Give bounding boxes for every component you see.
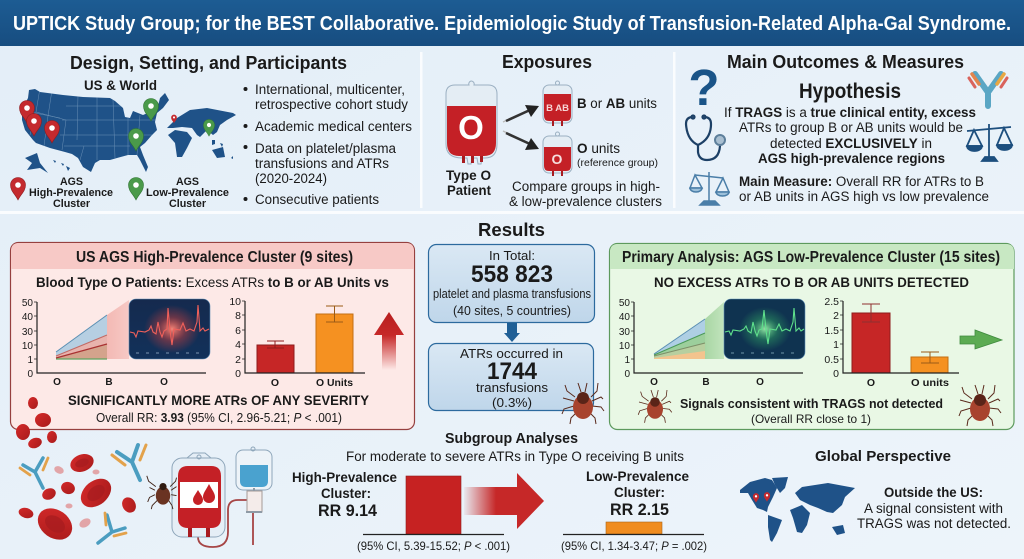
- area chart: low prevalence: 30: [619, 327, 630, 338]
- text: overall RR close to 1: (Overall RR close to 1): [751, 412, 871, 426]
- area chart: low prevalence: O: [756, 377, 764, 388]
- tube: [198, 500, 247, 547]
- axis line and CI: low prevalence: (95% CI, 1.34-3.47; P = .002): [561, 539, 707, 553]
- icon: stethoscope: [686, 116, 725, 160]
- arrow: flat right: [960, 330, 1002, 349]
- bar chart: low prevalence: O: [867, 377, 875, 389]
- legend: high prevalence: AGS: [60, 176, 83, 188]
- red blood cells: [16, 397, 139, 546]
- area chart: high prevalence: 10: [22, 341, 33, 352]
- icon: balance scale right: [967, 124, 1012, 161]
- area chart: low prevalence: [619, 298, 803, 388]
- arrow: totals to ATRs: [504, 323, 520, 342]
- bar chart: low prevalence: 0.5: [824, 354, 839, 366]
- image: red ECG monitor: [129, 299, 210, 359]
- label: low prevalence RR: Low-Prevalence: [586, 469, 689, 484]
- text: compare groups: & low-prevalence clusters: [509, 194, 662, 209]
- legend: low prevalence: Cluster: [169, 198, 207, 210]
- antibody left: [20, 458, 48, 488]
- panel: ATRs occurred: [428, 344, 594, 410]
- label: O units reference group: O units: [577, 141, 620, 156]
- map: US and world: [20, 88, 236, 173]
- text: outside the US: A signal consistent with: [864, 501, 1003, 516]
- area chart: high prevalence: 30: [22, 327, 33, 338]
- pin: low prevalence 1: [144, 98, 158, 121]
- bullet list: study design: transfusions and ATRs: [255, 156, 389, 171]
- panel: primary analysis low-prevalence cluster: [610, 244, 1014, 430]
- antibody upper right: [112, 445, 146, 480]
- bar chart: high prevalence: [229, 296, 365, 389]
- bar chart: low prevalence: O units: [911, 377, 949, 389]
- icon: tick right: [959, 385, 1001, 426]
- panel header: high prevalence: US AGS High-Prevalence Cluster (9 sites): [76, 249, 353, 266]
- icon: question mark: ?: [688, 59, 720, 116]
- text: transfusions detail: (40 sites, 5 countries): [453, 303, 571, 318]
- text: main measure: Main Measure: Overall RR for ATRs to B: [739, 174, 984, 189]
- blood bag: [172, 458, 225, 537]
- bar chart: high prevalence: 10: [229, 296, 241, 308]
- arrow: to O units: [503, 131, 539, 150]
- text: hypothesis statement: detected EXCLUSIVELY in: [770, 136, 932, 151]
- label: high prevalence RR: [292, 470, 397, 520]
- heading: subgroup analyses: Subgroup Analyses: [445, 431, 578, 447]
- text: outside the US: Outside the US:: [884, 485, 983, 500]
- bar: high prevalence RR 9.14: [406, 476, 461, 534]
- bullet list: study design: Consecutive patients: [255, 192, 379, 207]
- drip chamber: [247, 491, 262, 512]
- bar chart: low prevalence: 1.5: [824, 325, 839, 337]
- subheading: blood type O patients: Blood Type O Patients: Excess ATRs to B or AB Units vs: [36, 275, 389, 290]
- text: compare groups: [509, 179, 662, 209]
- text: outside the US: [857, 485, 1011, 531]
- area chart: low prevalence: 1: [624, 355, 630, 366]
- pin: high prevalence 1: [20, 100, 34, 123]
- area chart: low prevalence: 10: [619, 341, 630, 352]
- area chart: high prevalence: 0: [27, 369, 33, 380]
- panel header: high prevalence: [11, 243, 414, 269]
- panel: ATRs occurred: transfusions: [476, 380, 549, 395]
- text: hypothesis statement: AGS high-prevalence regions: [758, 151, 945, 166]
- heading: main outcomes: Main Outcomes & Measures: [727, 52, 964, 72]
- bullet list: study design: [244, 82, 412, 207]
- legend: low prevalence: Low-Prevalence: [146, 187, 229, 199]
- legend: low prevalence: [128, 176, 229, 210]
- bar chart: low prevalence: 0: [833, 368, 839, 380]
- area chart: low prevalence: B: [702, 377, 710, 388]
- legend: high prevalence: High-Prevalence: [29, 187, 113, 199]
- axis line and CI: high prevalence: (95% CI, 5.39-15.52; P < .001): [357, 539, 510, 553]
- bar chart: high prevalence: 0: [235, 368, 241, 380]
- panel: main outcomes and measures: [686, 52, 1012, 205]
- label: high prevalence RR: RR 9.14: [318, 501, 378, 520]
- map: world: [740, 477, 855, 542]
- bar chart: low prevalence: 2: [833, 310, 839, 322]
- label: O units reference group: [577, 141, 658, 169]
- label: low prevalence RR: [586, 469, 689, 519]
- arrow: to B or AB units: [503, 105, 539, 122]
- icon: O blood bag: O: [552, 151, 563, 167]
- pin: high prevalence 3: [44, 120, 60, 143]
- panel: global perspective: [740, 448, 1011, 542]
- label: high prevalence RR: High-Prevalence: [292, 470, 397, 485]
- label: type O patient: Type O: [446, 167, 491, 183]
- map label: US and World: US & World: [84, 78, 157, 93]
- legend: high prevalence: Cluster: [53, 198, 91, 210]
- text: subgroup description: For moderate to severe ATRs in Type O receiving B units: [346, 449, 684, 464]
- area chart: low prevalence: 50: [619, 298, 630, 309]
- icon: large type O blood bag: O: [458, 109, 484, 146]
- title banner: [0, 0, 1024, 46]
- heading: design: Design, Setting, and Participants: [70, 53, 347, 73]
- heading: results: Results: [478, 220, 545, 240]
- pin: Europe: [171, 115, 177, 123]
- text: main measure: [739, 174, 989, 204]
- area chart: high prevalence: [22, 298, 206, 388]
- icon: balance scale left: [690, 172, 729, 205]
- panel header: low prevalence: [610, 244, 1014, 269]
- icon: tick left: [638, 390, 672, 423]
- icon: B AB blood bag: B AB: [546, 103, 569, 114]
- pin: low prevalence 2: [128, 128, 144, 151]
- cell centres: [42, 457, 108, 536]
- text: hypothesis statement: ATRs to group B or AB units would be: [739, 120, 963, 135]
- label: type O patient: Patient: [447, 182, 491, 198]
- pin: high prevalence 2: [26, 114, 42, 136]
- label: high prevalence RR: Cluster:: [321, 486, 371, 501]
- icon: O blood bag: [543, 132, 572, 176]
- area chart: low prevalence: O: [650, 377, 658, 388]
- tick on bag: [147, 476, 176, 509]
- bullet list: study design: Data on platelet/plasma: [255, 141, 396, 156]
- text: significantly more ATRs: SIGNIFICANTLY MORE ATRs OF ANY SEVERITY: [68, 392, 370, 408]
- panel: design, setting, and participants: [10, 53, 412, 210]
- text: hypothesis statement: If TRAGS is a true clinical entity, excess: [724, 105, 976, 120]
- label: low prevalence RR: Cluster:: [614, 485, 665, 500]
- subheading: no excess ATRs: NO EXCESS ATRs TO B OR AB UNITS DETECTED: [654, 275, 969, 290]
- text: overall RR: Overall RR: 3.93 (95% CI, 2.96-5.21; P < .001): [96, 411, 342, 425]
- arrow: up increase: [374, 312, 404, 370]
- legend: low prevalence: AGS: [176, 176, 199, 188]
- IV saline bag: [236, 450, 272, 490]
- area chart: high prevalence: O: [160, 377, 168, 388]
- bar chart: high prevalence: 2: [235, 354, 241, 366]
- label: O units reference group: (reference group): [577, 157, 658, 169]
- bar chart: high prevalence: 4: [235, 339, 241, 351]
- bar chart: high prevalence: 8: [235, 310, 241, 322]
- legend: high prevalence: [10, 176, 113, 210]
- number: 558 823: 558 823: [471, 261, 553, 288]
- text: signals consistent: Signals consistent with TRAGS not detected: [680, 396, 943, 411]
- bullet list: study design: Academic medical centers: [255, 119, 412, 134]
- panel: ATRs occurred: ATRs occurred in: [460, 346, 563, 361]
- area chart: high prevalence: O: [53, 377, 61, 388]
- panel: US AGS high-prevalence cluster: [10, 242, 414, 430]
- text: in total: In Total:: [489, 248, 535, 263]
- area chart: high prevalence: 50: [22, 298, 33, 309]
- bar chart: low prevalence: [824, 296, 959, 389]
- panel: exposures: [446, 52, 662, 209]
- label: type O patient: [446, 167, 491, 198]
- bullet list: study design: International, multicenter,: [255, 82, 405, 97]
- pale platelets: [53, 465, 100, 529]
- bullet list: study design: retrospective cohort study: [255, 97, 408, 112]
- bar chart: high prevalence: 6: [235, 325, 241, 337]
- image: green ECG monitor: [724, 299, 805, 359]
- icon: tick: [562, 383, 604, 424]
- antibody bottom: [98, 513, 126, 543]
- pin: low prevalence Asia: [203, 119, 215, 136]
- text: hypothesis statement: [724, 105, 976, 166]
- area chart: low prevalence: 0: [624, 369, 630, 380]
- text: transfusions detail: platelet and plasma transfusions: [433, 287, 591, 301]
- text: main measure: or AB units in AGS high vs low prevalence: [739, 189, 989, 204]
- illustration: red cells, antibodies, tick and transfusion bags: [16, 397, 272, 547]
- panel: totals: [428, 244, 594, 322]
- bullet list: study design: (2020-2024): [255, 171, 327, 186]
- panel: subgroup analyses: [292, 431, 707, 553]
- label: B or AB units: B or AB units: [577, 96, 657, 111]
- icon: B AB blood bag: [543, 81, 572, 126]
- icon: large type O blood bag: [446, 81, 497, 164]
- label: low prevalence RR: RR 2.15: [610, 500, 669, 519]
- text: compare groups: Compare groups in high-: [512, 179, 660, 194]
- text: transfusions detail: [433, 287, 591, 318]
- heading: exposures: Exposures: [502, 52, 592, 72]
- heading: global perspective: Global Perspective: [815, 448, 951, 465]
- panel: ATRs occurred: 1744: [487, 358, 538, 385]
- panel: ATRs occurred: (0.3%): [492, 395, 532, 410]
- heading: hypothesis: Hypothesis: [799, 80, 901, 103]
- bar chart: low prevalence: 1: [833, 339, 839, 351]
- bar chart: high prevalence: O: [271, 377, 279, 389]
- area chart: high prevalence: B: [105, 377, 113, 388]
- bar: low prevalence RR 2.15: [606, 522, 662, 534]
- area chart: high prevalence: 40: [22, 312, 33, 323]
- bar chart: low prevalence: 2.5: [824, 296, 839, 308]
- bar chart: high prevalence: O Units: [316, 377, 353, 389]
- icon: antibody: [969, 74, 1007, 106]
- area chart: low prevalence: 40: [619, 312, 630, 323]
- text: outside the US: TRAGS was not detected.: [857, 516, 1011, 531]
- arrow: high to low: [464, 473, 544, 529]
- area chart: high prevalence: 1: [27, 355, 33, 366]
